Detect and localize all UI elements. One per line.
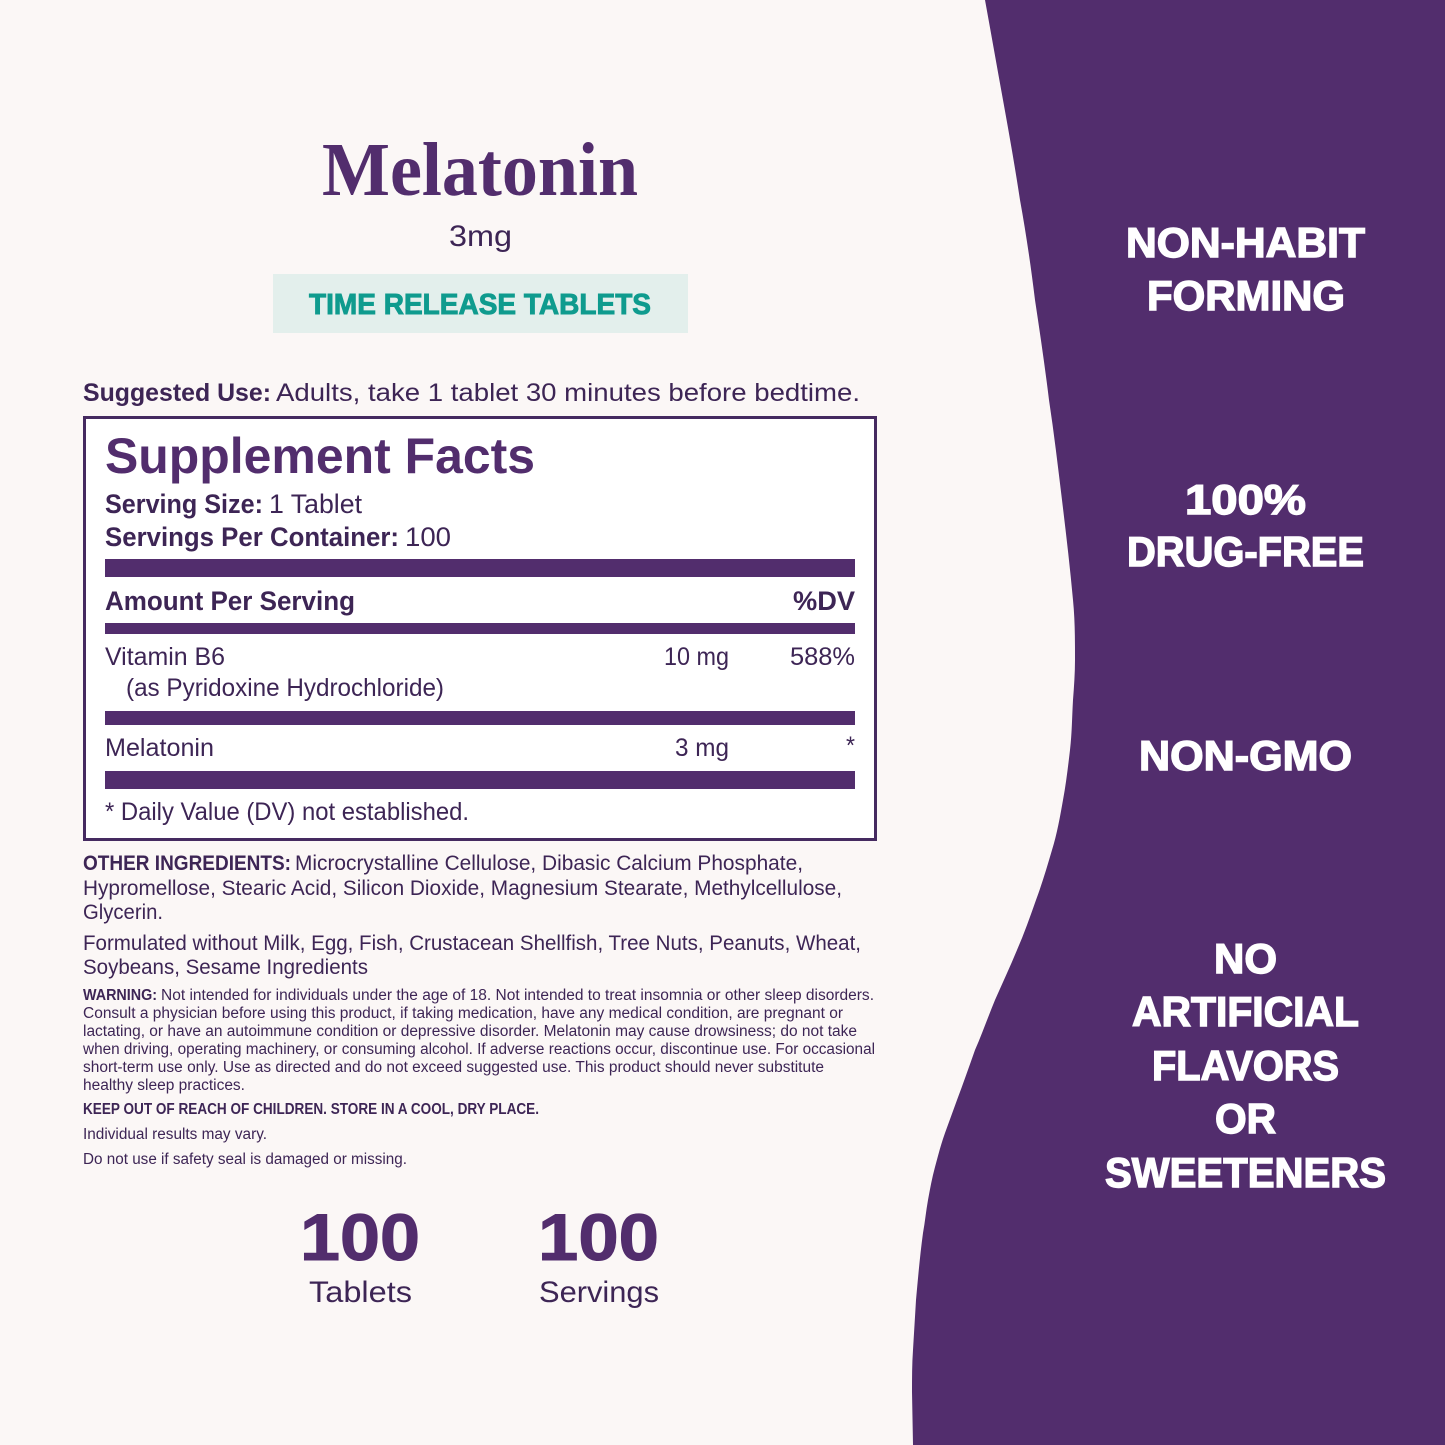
storage note: KEEP OUT OF REACH OF CHILDREN. STORE IN A COOL, DRY PLACE. (83, 1101, 539, 1118)
serving size: Serving Size: (105, 489, 263, 519)
other ingredients (83, 852, 842, 924)
warning: lactating, or have an autoimmune condition or depressive disorder. Melatonin may cause drowsiness; do not take (83, 1023, 857, 1040)
other ingredients: Glycerin. (83, 901, 163, 924)
seal note: Do not use if safety seal is damaged or missing. (83, 1151, 407, 1168)
claim: non-gmo: NON-GMO (1139, 732, 1352, 779)
allergen statement (83, 932, 861, 979)
claim: no artificial flavors or sweeteners: SWEETENERS (1105, 1149, 1386, 1196)
row: vitamin b6: 10 mg (664, 643, 729, 671)
serving size (105, 489, 362, 519)
row: vitamin b6: Vitamin B6 (105, 643, 225, 671)
allergen statement: Formulated without Milk, Egg, Fish, Crustacean Shellfish, Tree Nuts, Peanuts, Wheat, (83, 932, 861, 955)
suggested use: Adults, take 1 tablet 30 minutes before bedtime. (276, 379, 860, 407)
claim: no artificial flavors or sweeteners (1105, 935, 1386, 1196)
table header: Amount Per Serving (105, 586, 355, 616)
stat: 100 tablets (300, 1200, 420, 1309)
stat: 100 servings (538, 1200, 659, 1309)
badge: time release tablets (273, 274, 688, 333)
claim: no artificial flavors or sweeteners: OR (1215, 1095, 1276, 1142)
warning: healthy sleep practices. (83, 1077, 245, 1094)
panel: purple wave (912, 0, 1445, 1445)
claim: 100% drug-free (1127, 476, 1364, 575)
other ingredients: Hypromellose, Stearic Acid, Silicon Dioxide, Magnesium Stearate, Methylcellulose, (83, 877, 842, 900)
row: melatonin: Melatonin (105, 734, 214, 762)
stat: 100 servings: 100 (538, 1200, 659, 1274)
warning: Not intended for individuals under the age of 18. Not intended to treat insomnia or other sleep disorders. (161, 987, 874, 1004)
table header: %DV (793, 586, 855, 616)
servings per container: Servings Per Container: (105, 522, 399, 552)
claim: non-habit forming: FORMING (1147, 272, 1345, 319)
claim: non-habit forming (1126, 219, 1365, 319)
row: melatonin (105, 732, 855, 762)
suggested use (83, 379, 860, 407)
badge: time release tablets: TIME RELEASE TABLETS (309, 289, 651, 321)
stat: 100 servings: Servings (539, 1276, 659, 1309)
row: vitamin b6: (as Pyridoxine Hydrochloride) (126, 674, 444, 702)
table header (105, 586, 855, 616)
heading: supplement facts: Supplement Facts (105, 428, 535, 484)
warning: short-term use only. Use as directed and do not exceed suggested use. This product should never substitute (83, 1059, 824, 1076)
footnote: * Daily Value (DV) not established. (105, 798, 469, 826)
stat: 100 tablets: Tablets (309, 1276, 412, 1309)
claim: 100% drug-free: 100% (1185, 476, 1306, 523)
servings per container: 100 (405, 522, 451, 552)
other ingredients: Microcrystalline Cellulose, Dibasic Calcium Phosphate, (295, 852, 803, 875)
claim: non-habit forming: NON-HABIT (1126, 219, 1365, 266)
claim: no artificial flavors or sweeteners: ARTIFICIAL (1132, 988, 1359, 1035)
claim: no artificial flavors or sweeteners: FLAVORS (1152, 1042, 1339, 1089)
warning: Consult a physician before using this product, if taking medication, have any medical condition, are pregnant or (83, 1005, 843, 1022)
row: vitamin b6 (105, 643, 855, 702)
claim: no artificial flavors or sweeteners: NO (1214, 935, 1277, 982)
row: melatonin: * (846, 732, 855, 760)
row: melatonin: 3 mg (675, 734, 729, 762)
row: vitamin b6: 588% (790, 643, 855, 671)
allergen statement: Soybeans, Sesame Ingredients (83, 956, 368, 979)
dosage: 3mg (449, 220, 512, 253)
other ingredients: OTHER INGREDIENTS: (83, 852, 291, 875)
serving size: 1 Tablet (269, 489, 362, 519)
title: Melatonin (322, 128, 638, 212)
results note: Individual results may vary. (83, 1126, 267, 1143)
warning (82, 987, 875, 1094)
stat: 100 tablets: 100 (300, 1200, 420, 1274)
warning: WARNING: (83, 987, 157, 1004)
suggested use: Suggested Use: (83, 379, 271, 407)
claim: 100% drug-free: DRUG-FREE (1127, 528, 1364, 575)
warning: when driving, operating machinery, or consuming alcohol. If adverse reactions occur, discontinue use. For occasional (82, 1041, 875, 1058)
panel: supplement facts (84, 418, 876, 840)
